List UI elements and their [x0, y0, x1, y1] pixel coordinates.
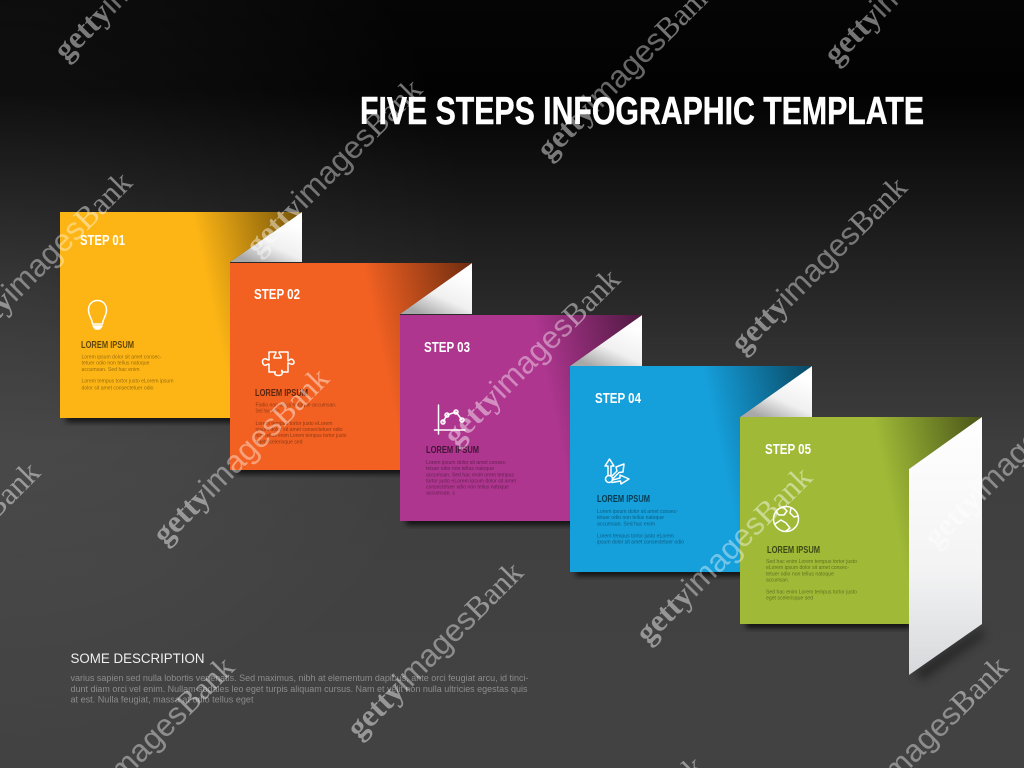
panel: step 03: tortor justo eLorem ipsum dolor sit amet [426, 478, 517, 484]
icon: puzzle piece [262, 352, 294, 376]
panel: step 05 [740, 417, 984, 680]
panel: step 03: LOREM IPSUM [426, 444, 479, 456]
panel: step 04: accumsan. Sed hac enim [597, 521, 655, 527]
panel: step 03: tetuer odio non tellus natoque [426, 466, 494, 472]
panel: step 05: Sed hac enim Lorem tempus tortor justo [766, 589, 857, 595]
watermarks: gettyimagesBank [435, 260, 627, 452]
description block: at est. Nulla feugiat, massa at odio tellus eget [70, 694, 254, 704]
icon: line chart [434, 405, 465, 434]
panel: step 02: STEP 02 [254, 286, 300, 303]
panel: step 02: ipsum dolor sit amet consectetuer odio [256, 427, 343, 433]
panel: step 02: non tellus enim Lorem tempus tortor justo [256, 433, 347, 439]
icon: globe [774, 506, 798, 532]
panel: step 03: STEP 03 [424, 339, 470, 356]
panel: step 02: Lorem tempus tortor justo eLorem [256, 421, 332, 427]
panel: step 05: LOREM IPSUM [767, 544, 820, 556]
panel: step 01 [60, 212, 302, 422]
panel: step 03 [400, 315, 642, 525]
panel: step 02: Fodio non tellus natoque accumsan. [256, 403, 336, 409]
panel: step 04: STEP 04 [595, 390, 642, 407]
panel: step 05: accumsan. [766, 577, 789, 583]
panel: step 02: eget scelerisque sed [256, 440, 303, 446]
description block: varius sapien sed nulla lobortis venenatis. Sed maximus, nibh at elementum dapibus, ante orci feugiat arcu, id tinci- [70, 673, 528, 683]
panel: step 02: LOREM IPSUM [255, 387, 308, 399]
description block: dunt diam orci vel enim. Nullam sodales leo eget turpis aliquam cursus. Nam et velit non nulla ultricies egestas quis [70, 684, 528, 694]
panel: step 01: STEP 01 [80, 232, 125, 249]
panel: step 05: Sed hac enim Lorem tempus tortor justo [766, 559, 857, 565]
panel: step 03: accumsan. Sed hac enim orem tempus [426, 472, 514, 478]
panel: step 04 [570, 366, 812, 576]
panel: step 02: Sed hac enim [256, 409, 280, 415]
panel: step 05: STEP 05 [765, 441, 811, 458]
icon: diverging arrows [605, 459, 629, 484]
panel: step 05: eLorem ipsum dolor sit amet consec- [766, 565, 849, 571]
panel: step 04: tetuer odio non tellus natoque [597, 515, 664, 521]
panel: step 01: LOREM IPSUM [81, 339, 134, 351]
watermarks: gettyimagesBank [144, 359, 336, 551]
panel: step 03: consectetuer odio non tellus natoque [426, 485, 509, 491]
panel: step 04: ipsum dolor sit amet consectetuer odio [597, 539, 684, 545]
watermarks: gettyimagesBank [627, 458, 819, 650]
icon: light bulb [88, 300, 106, 329]
panel: step 04: Lorem tempus tortor justo eLorem [597, 533, 674, 539]
panel: step 05: eget scelerisque sed [766, 596, 813, 602]
panel: step 01: Lorem tempus tortor justo eLorem ipsum [82, 379, 174, 385]
panel: step 01: accumsan. Sed hac enim [82, 367, 140, 373]
panel: step 01: tetuer odio non tellus natoque [82, 361, 150, 367]
panel: step 04: Lorem ipsum dolor sit amet consec- [597, 509, 678, 515]
watermarks: gettyimagesBank [237, 70, 429, 262]
panel: step 03: accumsan. s [426, 491, 455, 497]
description block [70, 651, 528, 704]
description block: SOME DESCRIPTION [70, 651, 204, 666]
panel: step 04: LOREM IPSUM [597, 493, 650, 505]
panel: step 02 [230, 263, 472, 474]
panel: step 05: tetuer odio non tellus natoque [766, 571, 834, 577]
panel: step 01: dolor sit amet consectetuer odio [82, 385, 154, 391]
panel: step 03: Lorem ipsum dolor sit amet consec- [426, 460, 507, 466]
panel: step 01: Lorem ipsum dolor sit amet consec- [82, 354, 162, 360]
white folded page [909, 417, 982, 675]
watermarks: gettyimagesBank [722, 168, 914, 360]
watermarks: gettyimagesBank [338, 553, 530, 745]
